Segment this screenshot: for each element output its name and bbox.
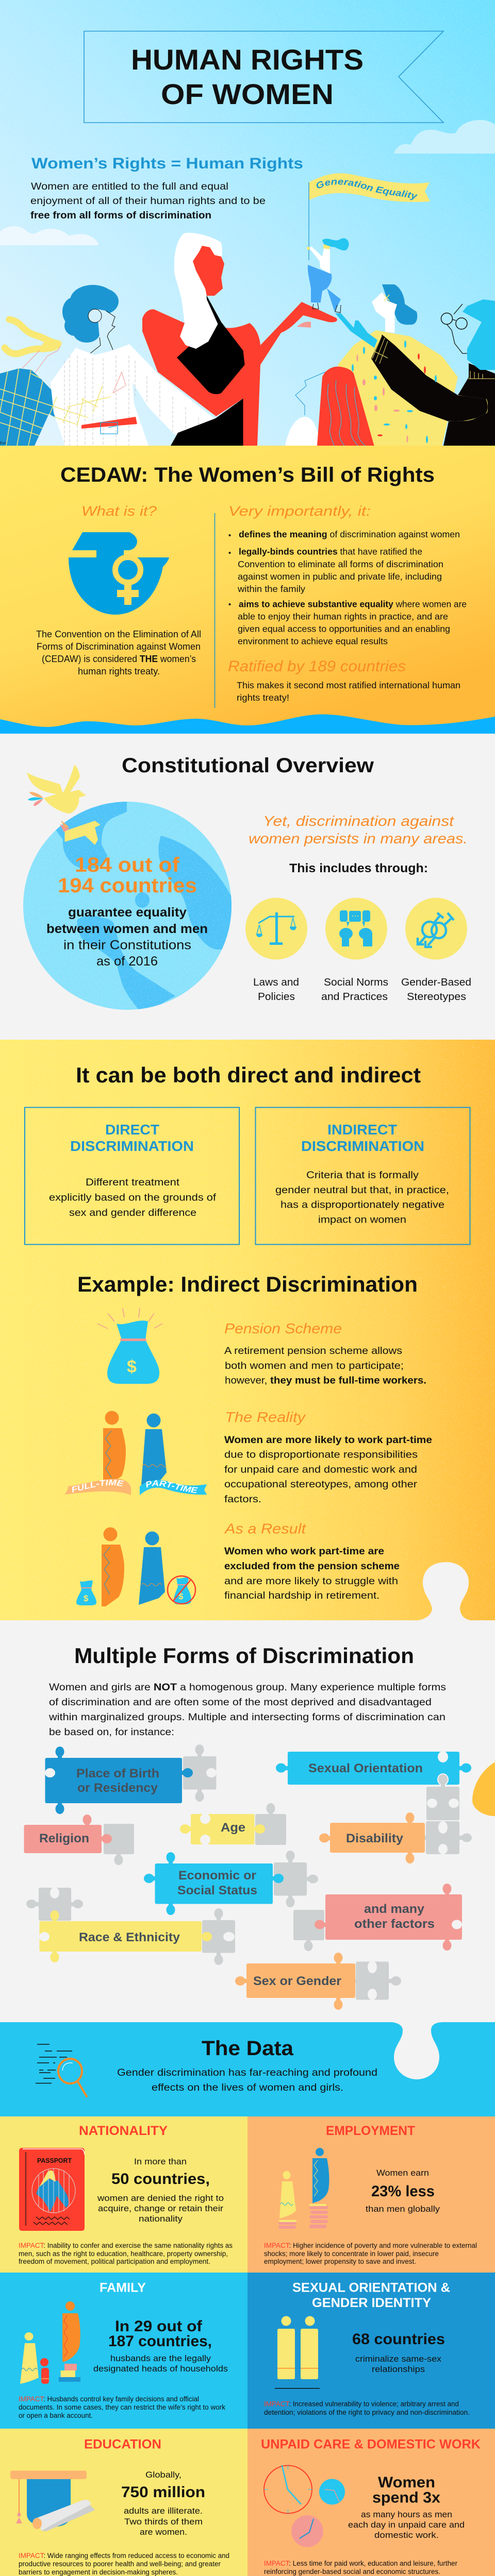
small credit: Esri <box>0 440 6 445</box>
text: the reality: due to disproportionate responsibilities <box>224 1450 418 1460</box>
panel: nationality: NATIONALITY <box>79 2124 168 2138</box>
label: social norms and practices <box>321 977 388 1003</box>
plaid pattern <box>0 367 119 446</box>
icon: money bag: $ <box>127 1357 137 1377</box>
impact: or open a bank account. <box>19 2412 93 2419</box>
panel: sexual orientation and gender identity: SEXUAL ORIENTATION & <box>292 2280 450 2295</box>
puzzle: age: Age <box>221 1821 245 1835</box>
panel: direct discrimination: DISCRIMINATION <box>70 1138 194 1154</box>
label: gender-based stereotypes: Stereotypes <box>407 991 466 1003</box>
illustration: man and woman on coins <box>278 2148 329 2229</box>
paragraph: multiple forms: Women and girls are NOT a homogenous group. Many experience multiple forms <box>49 1682 446 1693</box>
puzzle: place of birth or residency: Place of Birth <box>76 1767 159 1781</box>
label: laws and policies <box>253 977 299 1003</box>
panel: unpaid care: UNPAID CARE & DOMESTIC WORK <box>261 2437 481 2451</box>
subheading: This includes through: <box>289 861 428 875</box>
impact: IMPACT: Less time for paid work, education and leisure, further <box>264 2560 457 2567</box>
flag: generation equality <box>308 173 430 260</box>
heading: CEDAW: CEDAW: The Women’s Bill of Rights <box>60 464 435 486</box>
statistic: designated heads of households <box>93 2364 228 2374</box>
icon: magnifier <box>36 2044 87 2096</box>
text: as a result: As a Result <box>224 1521 306 1536</box>
label: laws and policies: Policies <box>258 991 295 1003</box>
illustration: family with husband on pedestal <box>20 2301 80 2384</box>
label: laws and policies: Laws and <box>253 977 299 988</box>
bullet list: able to enjoy their human rights in practice, and are <box>238 611 448 621</box>
section background: CEDAW <box>0 446 495 734</box>
puzzle: economic or social status: Social Status <box>177 1884 257 1897</box>
bullet list: environment to achieve equal results <box>238 636 388 646</box>
text: pension scheme: both women and men to participate; <box>225 1361 404 1371</box>
icon: speech heads, social norms <box>325 897 387 959</box>
illustration: left woman with plaid jacket <box>0 319 112 446</box>
ratified note <box>228 658 460 703</box>
statistic: husbands are the legally <box>110 2353 211 2363</box>
statistic: nationality <box>139 2214 183 2224</box>
illustration: same-sex couple <box>275 2316 320 2388</box>
section background: direct and indirect <box>0 1040 495 1620</box>
title banner <box>84 31 443 123</box>
icon: scales, laws and policies <box>245 897 307 959</box>
text: as a result: excluded from the pension scheme <box>224 1561 400 1572</box>
text: as a result: Women who work part-time are <box>224 1546 384 1557</box>
title banner: HUMAN RIGHTS <box>131 43 364 76</box>
section background: multiple forms <box>0 1562 495 2023</box>
section background: constitutional overview <box>0 734 495 1040</box>
icon: small money bag <box>76 1581 96 1605</box>
panel: indirect discrimination: Criteria that is formally <box>306 1170 419 1181</box>
drop shape from orange section <box>472 1762 495 1816</box>
statistic: domestic work. <box>374 2530 439 2540</box>
heading: example: Example: Indirect Discrimination <box>77 1272 418 1296</box>
icon: CEDAW venus emblem <box>69 532 169 615</box>
puzzle: and many other factors: and many <box>364 1902 425 1916</box>
statistic <box>352 2331 445 2374</box>
statistic: than men globally <box>366 2204 440 2214</box>
statistic: Globally, <box>145 2470 182 2480</box>
statistic: Women earn <box>376 2168 429 2178</box>
small dove on globe <box>60 820 101 845</box>
puzzle: sex or gender <box>235 1953 355 2010</box>
panel: nationality <box>0 2116 248 2273</box>
panel: direct discrimination: Different treatment <box>86 1177 180 1188</box>
impact: productive resources to poorer health and well-being; and greater <box>19 2560 221 2568</box>
impact: shocks; more likely to concentrate in lower paid, insecure <box>264 2250 439 2258</box>
heading: constitutional overview: Constitutional Overview <box>122 754 374 777</box>
icon: dove <box>27 765 86 814</box>
panel: indirect discrimination: DISCRIMINATION <box>301 1138 424 1154</box>
panel: family: FAMILY <box>100 2280 146 2295</box>
intro heading: Women’s Rights = Human Rights <box>31 155 303 172</box>
puzzle: gray pieces <box>26 1744 472 2000</box>
puzzle: and many other factors: other factors <box>354 1917 435 1931</box>
text: the reality: Women are more likely to work part-time <box>224 1435 432 1446</box>
ratified note: rights treaty! <box>237 692 289 703</box>
illustration: full-time and part-time workers <box>64 1411 207 1495</box>
paragraph: multiple forms <box>48 1682 446 1738</box>
impact: IMPACT: Increased vulnerability to violence; arbitrary arrest and <box>264 2400 459 2408</box>
puzzle: disability: Disability <box>346 1832 404 1845</box>
statistic <box>97 2157 224 2224</box>
impact <box>19 2552 229 2576</box>
globe with statistic <box>23 799 232 1015</box>
panel: direct discrimination: explicitly based on the grounds of <box>49 1192 217 1204</box>
label: social norms and practices: and Practices <box>321 991 388 1003</box>
text: the reality: factors. <box>224 1494 261 1505</box>
ratified note: This makes it second most ratified international human <box>237 680 460 690</box>
ratified note: Ratified by 189 countries <box>228 658 406 675</box>
impact: employment; lower propensity to save and invest. <box>264 2258 416 2265</box>
statistic: spend 3x <box>372 2489 440 2506</box>
puzzle: race and ethnicity <box>39 1910 212 1962</box>
intro text: free from all forms of discrimination <box>30 210 211 221</box>
impact <box>264 2560 457 2575</box>
heading: direct and indirect: It can be both direct and indirect <box>76 1063 421 1087</box>
puzzle: sex or gender: Sex or Gender <box>253 1974 341 1988</box>
impact <box>19 2395 225 2419</box>
impact: men, such as the right to education, healthcare, property ownership, <box>19 2250 228 2258</box>
impact <box>264 2400 470 2416</box>
impact: barriers to engagement in decision-making spheres. <box>19 2568 178 2576</box>
statistic: relationships <box>372 2364 425 2374</box>
ribbon: part-time: PART-TIME <box>146 1480 198 1493</box>
statistic <box>348 2474 465 2540</box>
puzzle: sexual orientation <box>276 1751 471 1788</box>
statistic: Two thirds of them <box>124 2517 203 2527</box>
statistic <box>93 2318 228 2374</box>
statistic: Women <box>378 2474 435 2491</box>
panel: sexual orientation and gender identity <box>248 2273 495 2429</box>
statistic: criminalize same-sex <box>355 2354 442 2364</box>
panel: sexual orientation and gender identity: GENDER IDENTITY <box>312 2296 431 2310</box>
label: social norms and practices: Social Norms <box>324 977 388 988</box>
icon: graduation cap and diploma <box>10 2471 95 2531</box>
paragraph: multiple forms: within marginalized groups. Multiple and intersecting forms of discrimination can <box>48 1712 446 1723</box>
panel: what is it <box>36 503 201 676</box>
illustration: central woman in red and black <box>142 233 337 446</box>
title banner: OF WOMEN <box>161 78 334 110</box>
illustration: woman with glasses <box>441 299 495 446</box>
intro text: enjoyment of all of their human rights and to be <box>30 195 266 207</box>
impact <box>264 2242 477 2265</box>
puzzle: disability <box>319 1812 425 1863</box>
panel: indirect discrimination: INDIRECT <box>327 1122 397 1138</box>
panel: indirect discrimination: has a disproportionately negative <box>280 1199 444 1211</box>
statistic: 187 countries, <box>108 2333 212 2350</box>
paragraph: multiple forms: of discrimination and are often some of the most deprived and disadvantaged <box>49 1697 432 1708</box>
text: what is CEDAW <box>36 629 201 676</box>
statistic: In 29 out of <box>115 2318 203 2335</box>
text: the reality: occupational stereotypes, among other <box>224 1479 418 1490</box>
callout: discrimination persists <box>249 813 468 846</box>
statistic <box>121 2470 205 2537</box>
text: pension scheme: however, they must be full-time workers. <box>225 1376 426 1386</box>
impact: IMPACT: Inability to confer and exercise the same nationality rights as <box>19 2242 233 2249</box>
panel: indirect discrimination <box>256 1108 470 1245</box>
puzzle: economic or social status: Economic or <box>178 1869 256 1883</box>
text: as a result: and are more likely to struggle with <box>224 1576 398 1587</box>
impact: detention; violations of the right to privacy and non-discrimination. <box>264 2409 470 2416</box>
text: the data intro: effects on the lives of women and girls. <box>152 2082 343 2093</box>
statistic <box>366 2168 440 2214</box>
panel: education: EDUCATION <box>84 2437 161 2451</box>
label: gender-based stereotypes: Gender-Based <box>401 977 471 988</box>
illustration: blue haired woman in white dress <box>51 285 232 446</box>
statistic: women are denied the right to <box>97 2193 224 2203</box>
panel: direct discrimination <box>25 1108 239 1245</box>
statistic: 750 million <box>121 2484 205 2501</box>
section: the data header <box>0 2022 495 2116</box>
icon: small money bag: $ <box>84 1594 89 1603</box>
impact: IMPACT: Husbands control key family decisions and official <box>19 2395 199 2403</box>
illustration: flag climbing woman <box>307 238 349 313</box>
text: pension scheme: A retirement pension scheme allows <box>224 1346 402 1357</box>
panel: direct discrimination: DIRECT <box>105 1122 159 1138</box>
statistic: acquire, change or retain their <box>98 2204 223 2213</box>
panel: unpaid care <box>248 2429 495 2576</box>
globe with statistic: between women and men <box>46 922 208 936</box>
globe with statistic: guarantee equality <box>68 905 187 920</box>
bullet list: defines the meaning of discrimination against women <box>239 529 460 539</box>
intro text: Women are entitled to the full and equal <box>31 181 228 192</box>
icon: clocks <box>264 2465 345 2547</box>
bullet list: Convention to eliminate all forms of discrimination <box>238 559 443 569</box>
impact: freedom of movement, political participation and employment. <box>19 2258 210 2265</box>
statistic: are women. <box>140 2527 187 2537</box>
flag: generation equality: Generation Equality <box>317 179 418 200</box>
impact: documents. In some cases, they can restrict the wife’s right to work <box>19 2403 225 2411</box>
text: what is CEDAW: The Convention on the Elimination of All <box>36 629 201 639</box>
paragraph: multiple forms: be based on, for instance: <box>49 1727 174 1738</box>
icon: passport <box>19 2148 85 2231</box>
statistic: each day in unpaid care and <box>348 2520 465 2530</box>
icon: gender symbols, stereotypes <box>405 897 467 959</box>
callout: discrimination persists: Yet, discrimination against <box>263 813 454 829</box>
statistic: In more than <box>134 2157 187 2166</box>
text: what is CEDAW: Forms of Discrimination against Women <box>37 641 201 652</box>
text: the reality: for unpaid care and domestic work and <box>224 1464 417 1476</box>
puzzle: race and ethnicity: Race & Ethnicity <box>79 1930 180 1944</box>
hero background <box>0 0 495 446</box>
icon: crossed out money bag <box>168 1576 195 1604</box>
impact <box>19 2242 233 2265</box>
impact: IMPACT: Higher incidence of poverty and more vulnerable to external <box>264 2242 477 2249</box>
bullet list: against women in public and private life, including <box>238 571 442 582</box>
text: what is CEDAW: (CEDAW) is considered THE women’s <box>42 654 196 664</box>
text: pension scheme: Pension Scheme <box>224 1320 342 1336</box>
icon: money bag <box>97 1308 162 1384</box>
bullet list: within the family <box>237 584 305 594</box>
puzzle: age <box>180 1814 265 1845</box>
statistic: as many hours as men <box>361 2510 452 2519</box>
globe with statistic: in their Constitutions <box>63 938 191 952</box>
icon: crossed out money bag: $ <box>178 1591 184 1601</box>
cloud: right <box>394 120 495 154</box>
text: pension scheme <box>224 1320 426 1386</box>
panel: very importantly <box>228 503 467 703</box>
statistic: 50 countries, <box>111 2171 210 2188</box>
bullet list <box>229 529 467 646</box>
bullet list: legally-binds countries that have ratified the <box>239 546 422 556</box>
cloud: left <box>0 226 98 245</box>
text: the reality <box>224 1409 432 1505</box>
puzzle: religion: Religion <box>39 1832 89 1845</box>
puzzle: economic or social status <box>144 1852 284 1915</box>
bullet list: aims to achieve substantive equality where women are <box>239 599 467 609</box>
bullet list: given equal access to opportunities and an enabling <box>238 623 450 634</box>
globe with statistic: 194 countries <box>58 874 197 897</box>
text: as a result <box>224 1521 400 1601</box>
impact: IMPACT: Wide ranging effects from reduced access to economic and <box>19 2552 229 2560</box>
panel: very importantly: Very importantly, it: <box>228 503 371 519</box>
impact: reinforcing gender-based social and economic structures. <box>264 2568 440 2575</box>
panel: employment: EMPLOYMENT <box>326 2124 415 2138</box>
panel: indirect discrimination: impact on women <box>318 1215 406 1225</box>
statistic: 23% less <box>371 2183 435 2200</box>
illustration: woman with yellow dress <box>335 284 488 446</box>
globe with statistic: as of 2016 <box>96 954 158 969</box>
panel: direct discrimination: sex and gender difference <box>69 1208 196 1218</box>
blue wave divider <box>0 714 495 734</box>
text: the reality: The Reality <box>225 1409 306 1425</box>
puzzle: and many other factors <box>315 1884 462 1951</box>
panel: education <box>0 2429 248 2576</box>
heading: the data: The Data <box>202 2037 294 2060</box>
statistic: 184 out of <box>75 854 180 876</box>
panel: employment <box>248 2116 495 2273</box>
statistic: 68 countries <box>352 2331 445 2348</box>
text: the data intro <box>117 2067 377 2093</box>
ribbon: full-time: FULL-TIME <box>72 1480 124 1493</box>
intro text <box>30 181 266 221</box>
heading: multiple forms: Multiple Forms of Discrimination <box>74 1643 414 1668</box>
puzzle: place of birth or residency: or Residency <box>77 1781 158 1795</box>
illustration: red haired woman <box>285 366 374 446</box>
label: gender-based stereotypes <box>401 977 471 1003</box>
puzzle: place of birth or residency <box>45 1747 193 1814</box>
puzzle: religion <box>24 1815 112 1853</box>
panel: what is it: What is it? <box>81 503 157 519</box>
statistic: adults are illiterate. <box>124 2506 203 2516</box>
text: the data intro: Gender discrimination has far-reaching and profound <box>117 2067 377 2078</box>
text: as a result: financial hardship in retirement. <box>224 1590 380 1601</box>
puzzle: sexual orientation: Sexual Orientation <box>308 1761 423 1775</box>
icon: passport: PASSPORT <box>37 2157 72 2164</box>
text: what is CEDAW: human rights treaty. <box>78 666 160 676</box>
callout: discrimination persists: women persists in many areas. <box>249 831 468 846</box>
puzzle: gray piece holes <box>50 1768 459 2000</box>
panel: indirect discrimination: gender neutral but that, in practice, <box>275 1185 449 1196</box>
panel: family <box>0 2273 248 2429</box>
illustration: pension result <box>76 1527 195 1606</box>
